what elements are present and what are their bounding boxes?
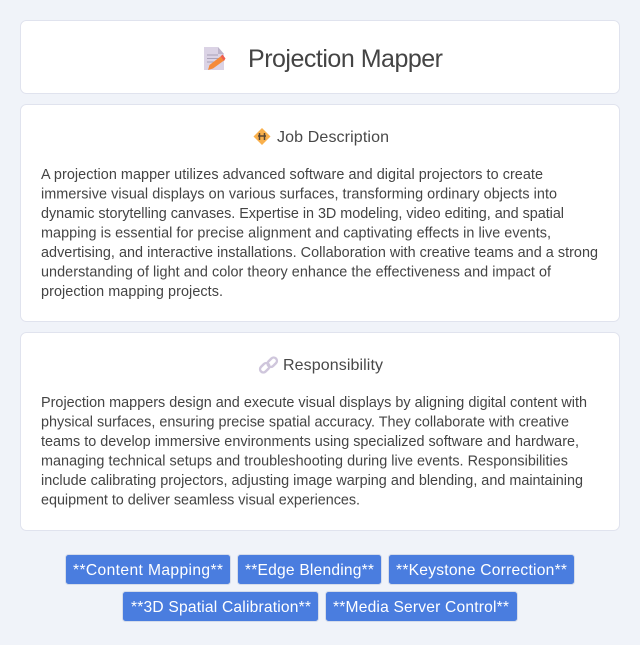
text block: responsibility: teams to develop immersive environments using specialized software and hardware, — [41, 434, 579, 450]
text block: job description: mapping is essential for precise alignment and captivating effects in live events, — [41, 226, 551, 242]
panel: title — [20, 20, 620, 94]
heading: responsibility: Responsibility — [283, 357, 383, 374]
text block: job description: A projection mapper utilizes advanced software and digital projectors to create — [41, 167, 543, 183]
text block: responsibility: Projection mappers design and execute visual displays by aligning digital content with — [41, 395, 587, 411]
text block: job description: projection mapping projects. — [41, 284, 223, 300]
text block: job description — [41, 167, 598, 300]
icon: diamond sign — [254, 128, 270, 145]
tag: content mapping: **Content Mapping** — [73, 562, 223, 579]
heading: job description: Job Description — [277, 129, 389, 146]
text block: responsibility: equipment to deliver seamless visual experiences. — [41, 492, 360, 508]
tag: edge blending — [238, 554, 382, 584]
text block: job description: dynamic storytelling canvases. Expertise in 3D modeling, video editing, and spatial — [41, 206, 564, 222]
text block: responsibility: include calibrating projectors, adjusting image warping and blending, and maintaining — [41, 473, 583, 489]
panel: job description — [20, 104, 620, 322]
tag: keystone correction — [388, 554, 574, 584]
text block: job description: immersive visual displays on various surfaces, transforming ordinary objects into — [41, 186, 557, 202]
tag: content mapping — [66, 554, 230, 584]
tag: 3d spatial calibration — [122, 592, 318, 622]
text block: responsibility — [41, 395, 587, 508]
skill tags — [66, 554, 574, 622]
title text: Projection Mapper — [248, 45, 443, 73]
tag: 3d spatial calibration: **3D Spatial Calibration** — [131, 599, 311, 616]
icon: chain link — [259, 356, 278, 374]
tag: edge blending: **Edge Blending** — [245, 562, 374, 579]
text block: responsibility: physical surfaces, ensuring precise spatial accuracy. They collaborate with creative — [41, 414, 569, 430]
tag: media server control: **Media Server Control** — [333, 599, 509, 616]
tag: keystone correction: **Keystone Correction** — [396, 562, 567, 579]
text block: job description: understanding of light and color theory enhance the effectiveness and impact of — [41, 264, 552, 280]
tag: media server control — [326, 592, 518, 622]
icon: document with pencil — [204, 47, 226, 70]
text block: job description: advertising, and interactive installations. Collaboration with creative teams and a strong — [41, 245, 598, 261]
text block: responsibility: managing technical setups and troubleshooting during live events. Responsibilities — [41, 454, 568, 470]
panel: responsibility — [20, 332, 620, 530]
